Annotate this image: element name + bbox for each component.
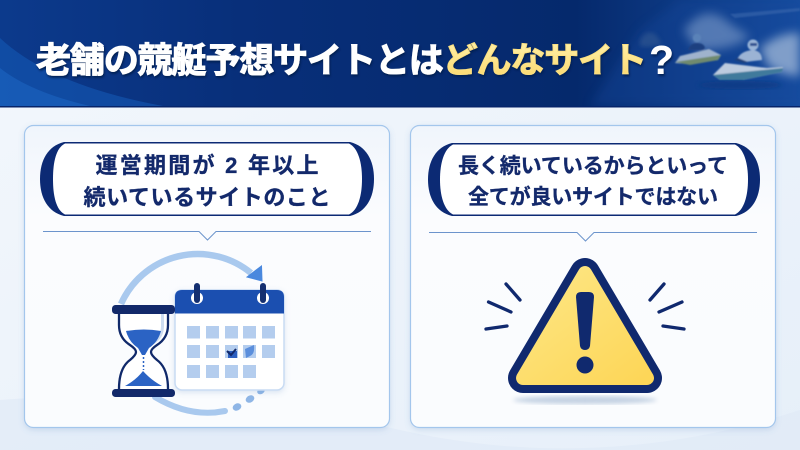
icon: warning triangle xyxy=(486,273,684,404)
divider with notch xyxy=(43,232,371,240)
icon: hourglass xyxy=(112,305,175,397)
front boat xyxy=(713,40,783,80)
image: boat race scene xyxy=(590,0,800,106)
pill heading: left xyxy=(40,142,374,216)
pill heading: left: 運営期間が 2 年以上 xyxy=(96,153,318,178)
icon: circular arrow xyxy=(121,254,266,413)
pill heading: right xyxy=(428,143,760,216)
header banner xyxy=(0,0,800,108)
pill heading: left: 続いているサイトのこと xyxy=(84,185,330,210)
panel: right xyxy=(410,126,776,428)
title: 老舗の競艇予想サイトとはどんなサイト xyxy=(36,42,647,80)
mid boat xyxy=(675,34,721,65)
title: ? xyxy=(649,37,674,83)
divider with notch xyxy=(429,232,757,241)
icon: calendar xyxy=(175,283,284,390)
pill heading: right: 長く続いているからといって xyxy=(458,155,728,178)
icon: alert rays xyxy=(486,284,684,329)
pill heading: right: 全てが良いサイトではない xyxy=(468,185,718,209)
panel: left xyxy=(24,126,390,428)
